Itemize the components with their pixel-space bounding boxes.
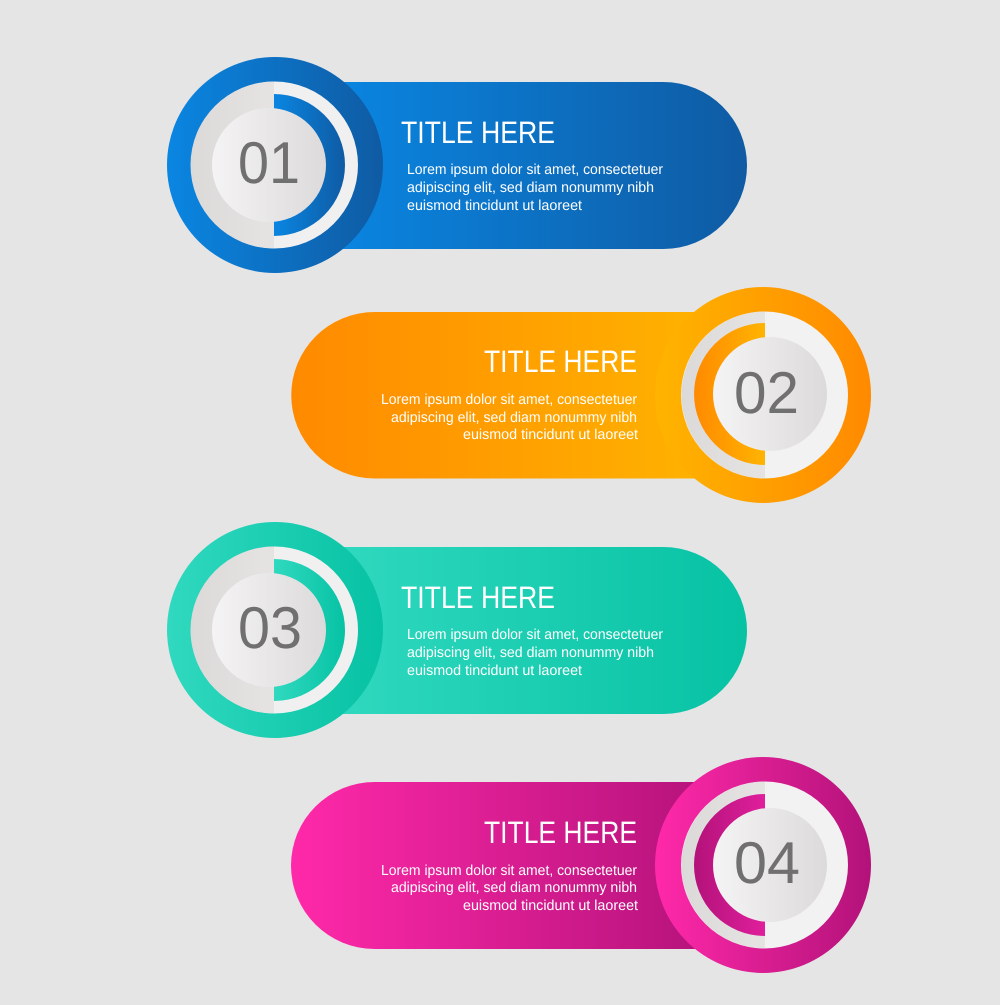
- pill: item 02: [291, 312, 721, 478]
- body text: item 03: [407, 627, 663, 679]
- badge: item 02: [655, 287, 871, 503]
- title: item 01: TITLE HERE: [401, 115, 555, 150]
- body text: item 01: adipiscing elit, sed diam nonummy nibh: [407, 180, 654, 196]
- body text: item 04: Lorem ipsum dolor sit amet, consectetuer: [381, 863, 637, 879]
- body text: item 03: adipiscing elit, sed diam nonummy nibh: [407, 645, 654, 661]
- number: 01: 01: [238, 130, 300, 196]
- title: item 02: TITLE HERE: [484, 344, 637, 379]
- body text: item 03: euismod tincidunt ut laoreet: [407, 663, 582, 679]
- badge: item 03: [167, 522, 383, 738]
- body text: item 02: adipiscing elit, sed diam nonummy nibh: [391, 410, 637, 426]
- body text: item 01: euismod tincidunt ut laoreet: [407, 198, 582, 214]
- pill: item 03: [330, 547, 747, 714]
- body text: item 04: [381, 863, 638, 914]
- body text: item 04: adipiscing elit, sed diam nonummy nibh: [391, 880, 637, 896]
- body text: item 04: euismod tincidunt ut laoreet: [463, 898, 638, 914]
- body text: item 01: Lorem ipsum dolor sit amet, consectetuer: [407, 162, 663, 178]
- panel: item 04: [291, 757, 871, 973]
- body text: item 01: [407, 162, 663, 214]
- pill: item 01: [330, 82, 747, 249]
- panel: item 01: [167, 57, 747, 273]
- body text: item 02: [381, 392, 638, 443]
- number: 04: 04: [734, 830, 800, 896]
- title: item 04: TITLE HERE: [484, 815, 637, 850]
- panel: item 03: [167, 522, 747, 738]
- number: 02: 02: [734, 360, 799, 426]
- badge: item 01: [167, 57, 383, 273]
- pill: item 04: [291, 782, 721, 949]
- body text: item 03: Lorem ipsum dolor sit amet, consectetuer: [407, 627, 663, 643]
- title: item 03: TITLE HERE: [401, 580, 555, 615]
- body text: item 02: euismod tincidunt ut laoreet: [463, 427, 638, 443]
- badge: item 04: [655, 757, 871, 973]
- panel: item 02: [291, 287, 871, 503]
- body text: item 02: Lorem ipsum dolor sit amet, consectetuer: [381, 392, 637, 408]
- number: 03: 03: [238, 595, 302, 661]
